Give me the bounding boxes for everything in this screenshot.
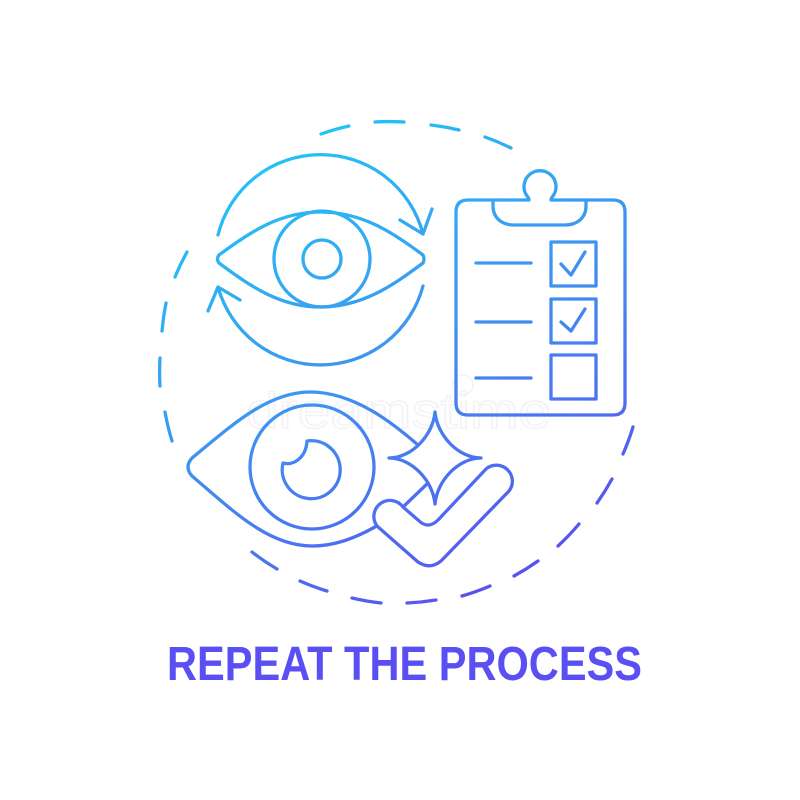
eye outline	[188, 392, 418, 546]
check badge	[374, 465, 512, 566]
dashed circle	[160, 122, 633, 603]
clipboard board and clip	[456, 171, 625, 415]
pupil	[303, 240, 341, 278]
eye outline	[218, 212, 424, 307]
sparkle	[389, 412, 481, 504]
check marks	[561, 252, 585, 331]
pupil	[282, 441, 340, 499]
arrow: top clockwise	[218, 155, 432, 235]
iris	[250, 405, 374, 529]
arrow: bottom clockwise	[208, 286, 423, 365]
icon: top eye with repeat arrows	[208, 155, 432, 365]
watermark: dreamstime	[246, 383, 551, 439]
title: REPEAT THE PROCESS	[167, 638, 642, 691]
icon: clipboard checklist	[456, 171, 625, 415]
iris	[274, 211, 370, 307]
checkboxes	[551, 242, 596, 286]
checklist lines	[476, 263, 531, 378]
icon: bottom eye with sparkle and check	[188, 392, 512, 566]
